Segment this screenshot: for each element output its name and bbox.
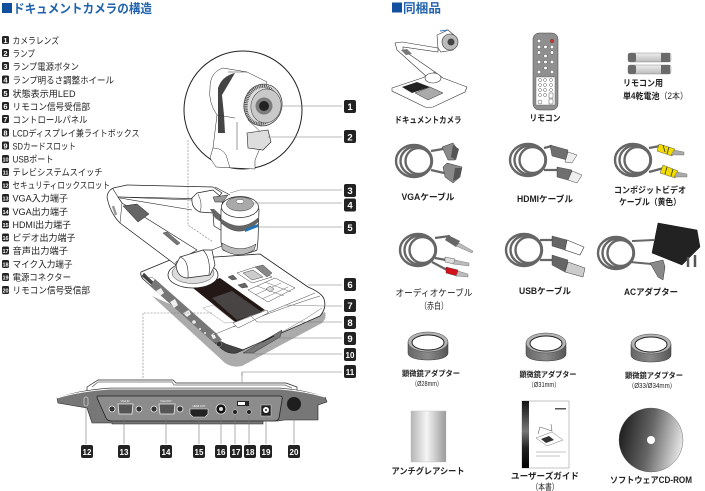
parts list: 2 (3, 49, 8, 58)
number callouts 1 to 11: 1 (347, 102, 353, 113)
parts list: リモコン信号受信部 (12, 101, 90, 112)
number callouts 1 to 11: 10 (346, 351, 355, 360)
parts list: 19 (2, 276, 9, 282)
parts list: 1 (3, 36, 8, 45)
number callouts 12 to 20: 17 (232, 448, 241, 457)
number callouts 12 to 20: 12 (83, 448, 92, 457)
heading: included items: 同梱品 (403, 2, 441, 16)
parts list: 15 (2, 223, 9, 229)
item: VGA cable (396, 143, 462, 202)
number callouts 1 to 11: 3 (347, 186, 353, 197)
item: anti-glare sheet: アンチグレアシート (392, 465, 464, 476)
item: microscope adapter 33/34mm: （Ø33/Ø34mm） (628, 382, 676, 390)
parts list: 10 (2, 158, 9, 164)
item: microscope adapter 31mm: 顕微鏡アダプター (520, 370, 576, 379)
parts list: VGA入力端子 (12, 192, 68, 204)
item: composite video cable: ケーブル（黄色） (619, 196, 681, 207)
item: microscope adapter 28mm: 顕微鏡アダプター (402, 369, 460, 378)
number callouts 12 to 20: 20 (290, 448, 299, 457)
pivot housing (176, 250, 215, 278)
parts list: 3 (3, 62, 8, 71)
parts list: 14 (2, 210, 9, 216)
parts list: 12 (2, 184, 9, 190)
item: software CD-ROM (610, 408, 692, 485)
parts list: ランプ電源ボタン (12, 62, 79, 72)
item: HDMI cable (510, 144, 582, 204)
item: AC adapter (598, 223, 700, 297)
number callouts 1 to 11: 2 (347, 132, 353, 144)
item: anti-glare sheet (392, 411, 464, 476)
parts list: 18 (2, 262, 9, 268)
number callouts 12 to 20: 13 (120, 448, 129, 457)
parts list: コントロールパネル (12, 115, 88, 125)
number callouts 1 to 11: 4 (347, 200, 353, 212)
parts list: 6 (3, 102, 8, 111)
parts list: ランプ (12, 49, 36, 59)
parts list: マイク入力端子 (12, 258, 72, 270)
parts list: 電源コネクター (12, 272, 71, 282)
item: document camera: ドキュメントカメラ (394, 115, 462, 125)
diagram: rear connector panel: VGA OUT (160, 399, 172, 403)
heading: document camera structure: ドキュメントカメラの構造 (13, 1, 152, 16)
item: audio cable (396, 234, 473, 311)
diagram: rear connector panel: VGA IN (121, 399, 129, 403)
item: microscope adapter 33/34mm (625, 334, 683, 390)
inset: camera lens detail (184, 51, 302, 169)
item: AC adapter: ACアダプター (624, 286, 678, 297)
neck (192, 190, 224, 232)
sd slot and usb port (243, 330, 282, 353)
leader lines: dashed and callouts (143, 106, 342, 378)
item: batteries: 単4乾電池（2本） (623, 90, 688, 101)
number callouts 1 to 11: 6 (347, 280, 353, 291)
item: user guide (511, 401, 579, 491)
number callouts 12 to 20: 15 (195, 448, 204, 457)
number callouts 1 to 11 (344, 100, 356, 378)
parts list: 4 (3, 76, 8, 84)
lcd screen (193, 278, 265, 322)
number callouts 1 to 11: 7 (347, 301, 353, 312)
parts list (2, 35, 140, 296)
item: batteries (623, 53, 688, 101)
number callouts 12 to 20: 14 (162, 448, 171, 457)
item: remote control: リモコン (530, 113, 561, 123)
item: composite video cable (614, 144, 687, 207)
control panel (228, 265, 295, 302)
item: microscope adapter 31mm: （Ø31mm） (528, 381, 560, 389)
base body (141, 254, 325, 353)
parts list: リモコン信号受信部 (12, 284, 90, 296)
item: composite video cable: コンポジットビデオ (614, 184, 686, 195)
number callouts 12 to 20: 18 (246, 448, 255, 457)
parts list: ビデオ出力端子 (12, 232, 76, 243)
rear panel leader lines (86, 372, 294, 444)
parts list: 状態表示用LED (12, 88, 76, 99)
item: USB cable: USBケーブル (519, 285, 571, 296)
parts list: ランプ明るさ調整ホイール (12, 74, 114, 86)
parts list: 7 (3, 115, 8, 124)
item: microscope adapter 31mm (520, 333, 576, 389)
parts list: 11 (3, 170, 8, 176)
item: document camera (392, 30, 467, 125)
parts list: 20 (2, 288, 9, 294)
number callouts 1 to 11: 5 (347, 223, 353, 234)
parts list: 17 (2, 249, 9, 255)
diagram: camera main illustration (107, 185, 326, 367)
number callouts 12 to 20: 16 (217, 448, 226, 457)
number callouts 1 to 11: 11 (346, 368, 355, 377)
parts list: 13 (2, 196, 9, 202)
item: remote control (530, 33, 561, 123)
item: microscope adapter 28mm: （Ø28mm） (412, 380, 442, 388)
parts list: SDカードスロット (12, 142, 76, 152)
base dark side (142, 273, 244, 353)
parts list: LCDディスプレイ兼ライトボックス (12, 128, 140, 138)
item: software CD-ROM: ソフトウェアCD-ROM (610, 475, 692, 485)
pivot ring on base (168, 262, 218, 288)
parts list: VGA出力端子 (12, 206, 68, 217)
number callouts 12 to 20: 19 (262, 448, 271, 457)
diagram: rear connector panel: HDMI OUT (193, 404, 206, 408)
item: microscope adapter 33/34mm: 顕微鏡アダプター (625, 371, 683, 380)
number callouts 1 to 11: 8 (347, 318, 353, 329)
item: HDMI cable: HDMIケーブル (517, 193, 573, 204)
parts list: セキュリティロックスロット (12, 180, 110, 190)
camera head (221, 209, 259, 254)
item: audio cable: （赤白） (420, 300, 448, 311)
number callouts 1 to 11: 9 (347, 334, 353, 345)
parts list: 9 (3, 142, 8, 150)
item: user guide: ユーザーズガイド (511, 470, 579, 481)
arm (107, 185, 222, 265)
diagram: rear connector panel (57, 380, 327, 424)
item: VGA cable: VGAケーブル (402, 191, 455, 202)
item: batteries: リモコン用 (623, 78, 663, 88)
parts list: カメラレンズ (12, 35, 59, 46)
number callouts 12 to 20 (81, 445, 300, 458)
item: microscope adapter 28mm (402, 332, 460, 388)
parts list: 16 (2, 236, 9, 242)
parts list: 音声出力端子 (12, 245, 68, 256)
item: audio cable: オーディオケーブル (396, 287, 472, 298)
parts list: HDMI出力端子 (12, 219, 71, 230)
parts list: 8 (3, 128, 8, 138)
parts list: 5 (3, 89, 8, 98)
parts list: USBポート (12, 154, 54, 164)
base shadow (152, 296, 326, 367)
parts list: テレビシステムスイッチ (12, 168, 102, 178)
item: USB cable (506, 234, 585, 296)
